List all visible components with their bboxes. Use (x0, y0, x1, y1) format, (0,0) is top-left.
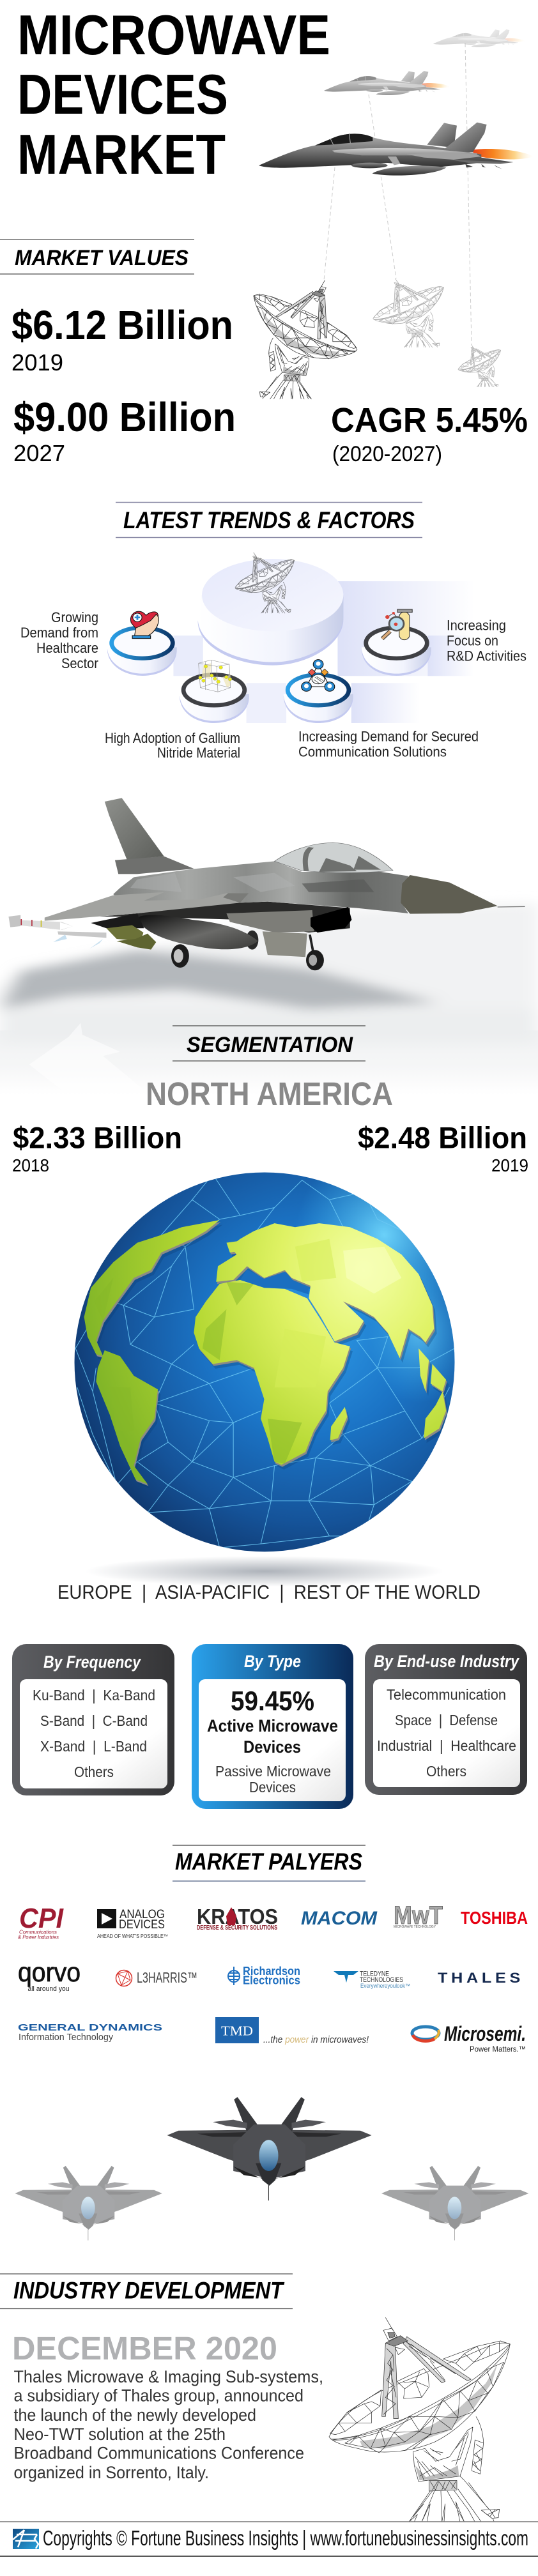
logo: Kratos: DEFENSE & SECURITY SOLUTIONS (197, 1924, 277, 1932)
logo: General Dynamics: GENERAL DYNAMICS (18, 2022, 162, 2033)
body text: organized in Sorrento, Italy. (14, 2463, 209, 2482)
panel heading: By Type (244, 1652, 301, 1671)
logo: CPI: CPI (19, 1903, 64, 1934)
list (207, 1716, 338, 1795)
logo: L3Harris (116, 1969, 197, 1986)
label: gallium nitride: High Adoption of Gallium (105, 730, 240, 746)
title (17, 3, 330, 186)
heading: segmentation: SEGMENTATION (187, 1033, 353, 1057)
logo: TMD: TMD (221, 2023, 253, 2039)
logo: L3Harris: L3HARRIS™ (137, 1969, 197, 1986)
value 2019 (358, 1120, 528, 1175)
value 2019: 2019 (491, 1155, 528, 1175)
disc: center with dish (198, 559, 343, 666)
title: DEVICES (17, 63, 228, 126)
logo: Richardson Electronics (228, 1965, 300, 1986)
panel heading: By End-use Industry (374, 1652, 520, 1671)
value 2018: 2018 (12, 1155, 49, 1175)
share value: 59.45% (231, 1686, 314, 1717)
panel: by frequency (12, 1644, 174, 1795)
logo: Analog Devices (97, 1908, 168, 1939)
illustration: globe (74, 1173, 455, 1552)
logo: Microsemi (412, 2022, 526, 2054)
logo: Richardson Electronics: Electronics (243, 1974, 300, 1986)
list: Telecommunication (387, 1686, 506, 1703)
logo: Richardson Electronics: Richardson (243, 1965, 300, 1978)
logo: Kratos: KRATOS (197, 1905, 278, 1928)
value 2019: $2.48 Billion (358, 1120, 527, 1155)
icon: heart in hand (131, 611, 158, 639)
logo: MwT: MICROWAVE TECHNOLOGY (394, 1925, 436, 1929)
logo: MwT: MwT (394, 1902, 443, 1930)
list: Devices (249, 1779, 296, 1795)
label: research: R&D Activities (447, 648, 526, 664)
label: healthcare: Demand from (20, 625, 98, 641)
icon: gallium nitride crystal lattice (199, 660, 232, 692)
logo: General Dynamics (18, 2022, 162, 2043)
heading: segmentation (173, 1026, 365, 1061)
label: gallium nitride (105, 730, 240, 761)
diagram: trends discs (107, 559, 475, 723)
cagr: (2020-2027) (332, 442, 442, 466)
cagr (331, 401, 528, 466)
logo: Teledyne: Everywhereyoulook™ (360, 1983, 410, 1989)
market value 2027: $9.00 Billion (13, 394, 236, 440)
label: secured communication: Increasing Demand for Secured (298, 728, 479, 745)
sub-element: missiles (8, 913, 144, 949)
logo: TMD: ...the power in microwaves! (263, 2034, 369, 2045)
disc: healthcare (107, 628, 177, 676)
label: research: Increasing (447, 617, 506, 634)
logo: Thales: THALES (438, 1970, 524, 1986)
disc: gallium nitride (180, 674, 249, 723)
list (377, 1686, 516, 1780)
floor shadow under fighter jet (0, 903, 538, 1094)
logo: General Dynamics: Information Technology (19, 2032, 113, 2043)
list: S-Band | C-Band (40, 1712, 148, 1729)
heading: market players: MARKET PALYERS (175, 1848, 362, 1875)
region name: NORTH AMERICA (146, 1076, 393, 1112)
globe shadow (86, 1556, 443, 1587)
panel heading: By Frequency (43, 1652, 142, 1672)
footer (0, 2522, 538, 2556)
market value 2027: 2027 (13, 440, 65, 466)
body text: a subsidiary of Thales group, announced (14, 2386, 304, 2405)
logo: Teledyne (334, 1970, 410, 1989)
logo: TMD (215, 2017, 369, 2045)
list: Others (74, 1764, 114, 1780)
list: Ku-Band | Ka-Band (33, 1687, 155, 1703)
trend labels (20, 609, 526, 761)
other regions: EUROPE | ASIA-PACIFIC | REST OF THE WORLD (58, 1581, 480, 1603)
body text: Neo-TWT solution at the 25th (14, 2425, 226, 2444)
value 2018 (12, 1120, 182, 1175)
list: Passive Microwave (215, 1763, 331, 1780)
list: Devices (243, 1737, 301, 1757)
date: DECEMBER 2020 (12, 2330, 277, 2366)
sub-element: bomb (106, 925, 156, 950)
logo: CPI: Communications (19, 1929, 57, 1935)
market value 2019: $6.12 Billion (12, 302, 233, 348)
list: X-Band | L-Band (40, 1738, 147, 1755)
heading: market values (0, 240, 194, 274)
list (33, 1687, 155, 1780)
heading: industry development: INDUSTRY DEVELOPMENT (13, 2278, 285, 2303)
illustration: stealth jets (15, 2097, 528, 2241)
panel: by end-use industry (365, 1644, 527, 1795)
heading: latest trends and factors: LATEST TRENDS & FACTORS (123, 507, 415, 533)
icon: research test tube and magnifier (382, 609, 412, 640)
illustration: jets linked to satellite dishes (254, 29, 534, 399)
logo: Macom: MACOM (301, 1908, 378, 1929)
label: healthcare (20, 609, 98, 671)
title: MARKET (17, 123, 226, 186)
list: Industrial | Healthcare (377, 1737, 516, 1754)
list: Space | Defense (395, 1712, 498, 1728)
logo: Analog Devices: AHEAD OF WHAT'S POSSIBLE™ (97, 1933, 168, 1939)
body text (14, 2367, 323, 2482)
heading: industry development (0, 2274, 293, 2308)
heading: market values: MARKET VALUES (15, 246, 188, 270)
market value 2019 (12, 302, 233, 376)
logo: Teledyne: TECHNOLOGIES (360, 1976, 403, 1984)
body text: the launch of the newly developed (14, 2405, 256, 2425)
logo: Qorvo: all around you (28, 1985, 69, 1993)
label: healthcare: Healthcare (36, 640, 98, 656)
disc: research (362, 628, 431, 676)
market value 2027 (13, 394, 236, 466)
list: Active Microwave (207, 1716, 338, 1735)
market value 2019: 2019 (12, 349, 63, 376)
cagr: CAGR 5.45% (331, 401, 528, 439)
icon: handshake network (302, 660, 335, 691)
value 2018: $2.33 Billion (13, 1120, 182, 1155)
label: healthcare: Sector (61, 655, 98, 671)
logo: Analog Devices: DEVICES (119, 1918, 165, 1932)
body text: Broadband Communications Conference (14, 2444, 304, 2463)
heading: latest trends and factors (116, 502, 422, 538)
logo: CPI: & Power Industries (18, 1934, 59, 1940)
label: research: Focus on (447, 632, 498, 649)
icon: fortune business insights logo (13, 2529, 39, 2549)
label: research (447, 617, 526, 664)
label: secured communication (298, 728, 479, 760)
illustration: fighter jet (8, 798, 525, 970)
icon: small dish on center disc (235, 553, 295, 613)
title: MICROWAVE (17, 3, 330, 66)
logo: Analog Devices: ANALOG (119, 1908, 165, 1921)
label: healthcare: Growing (51, 609, 98, 625)
body text: Thales Microwave & Imaging Sub-systems, (14, 2367, 323, 2386)
label: secured communication: Communication Solutions (298, 743, 447, 760)
illustration: large satellite dish (329, 2317, 510, 2522)
panel: by type (192, 1644, 353, 1809)
disc: secured communication (284, 674, 353, 723)
label: gallium nitride: Nitride Material (157, 745, 240, 761)
logo: Teledyne: TELEDYNE (360, 1970, 389, 1978)
list: Others (426, 1763, 466, 1780)
logo: Qorvo: qorvo (18, 1957, 81, 1987)
logo: Microsemi: Power Matters.™ (470, 2045, 526, 2054)
